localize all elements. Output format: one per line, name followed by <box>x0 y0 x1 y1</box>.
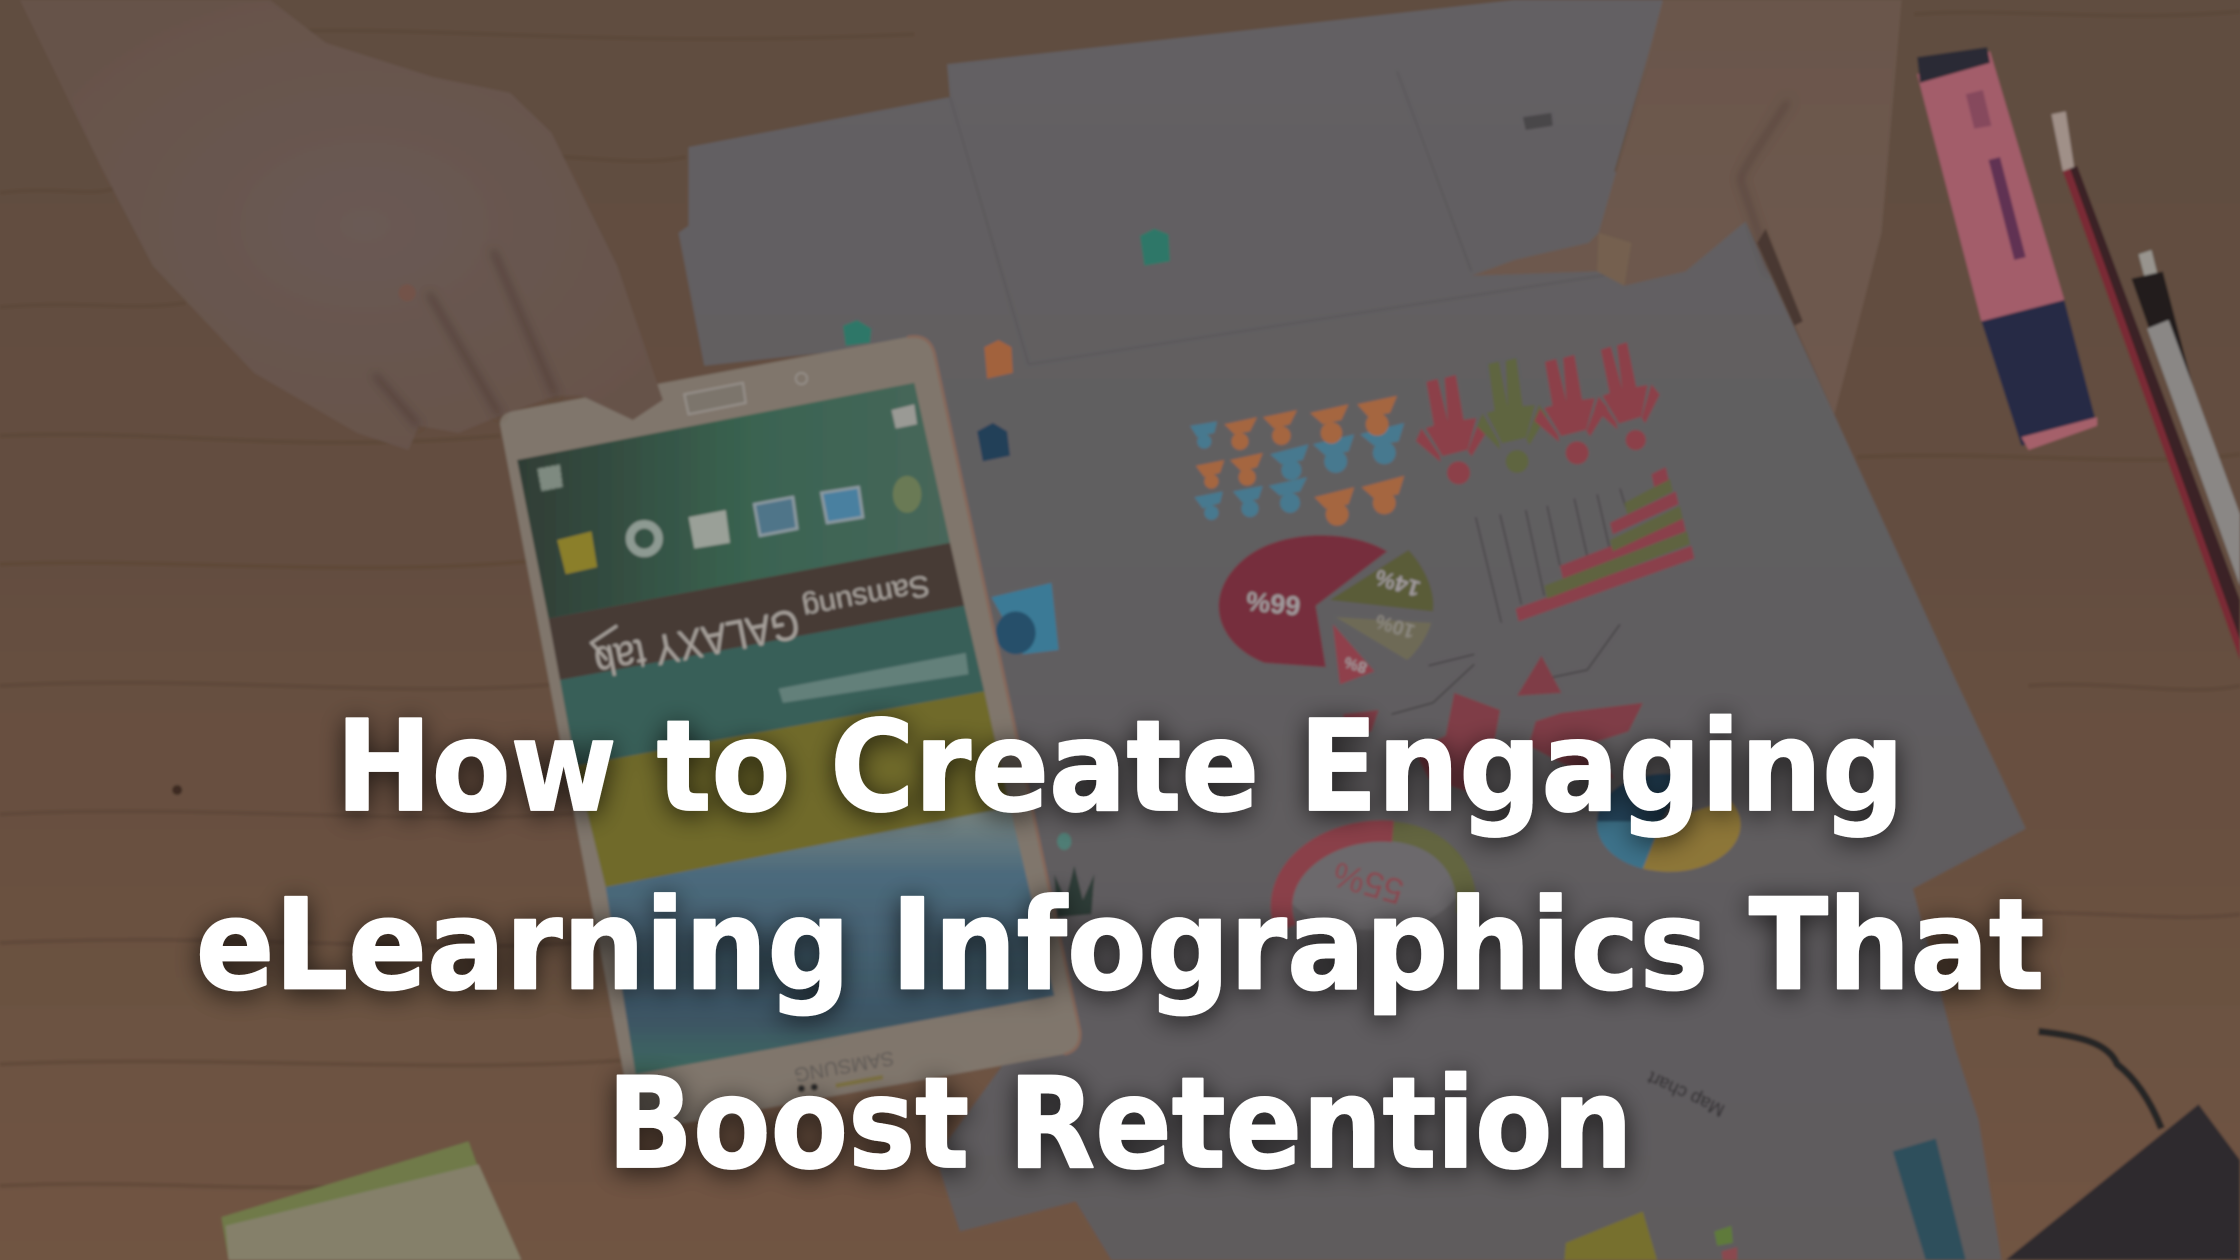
tablet <box>500 336 1080 1126</box>
upside-down device brand label <box>591 568 932 686</box>
pie chart with percentages: 10% <box>1373 609 1418 642</box>
tablet screen <box>517 383 1054 1074</box>
large inverted figures pictogram <box>1408 338 1664 484</box>
sticky notes <box>221 1141 521 1260</box>
black notebook with strap <box>2006 1031 2240 1260</box>
title line 2: eLearning Infographics That <box>196 872 2044 1019</box>
pie chart with percentages: 8% <box>1342 653 1369 676</box>
upside-down device brand label: Samsung <box>800 568 932 625</box>
title line 3: Boost Retention <box>607 1050 1633 1197</box>
title <box>196 693 2044 1197</box>
red pencil <box>2051 111 2240 660</box>
upside-down device brand label: GALAXY tab <box>591 599 803 686</box>
left hand <box>0 0 663 450</box>
pink highlighter <box>1917 47 2097 450</box>
title line 1: How to Create Engaging <box>336 693 1904 840</box>
pie chart with percentages: 66% <box>1245 585 1302 622</box>
crowd of small figures pictogram <box>1190 396 1404 526</box>
icon: small colored tabs on paper <box>843 229 1170 917</box>
printed paper stack <box>679 0 2026 1260</box>
color wheel chart <box>1597 774 1741 872</box>
donut chart with percentage: 55% <box>1328 854 1408 912</box>
horizontal bar chart <box>1476 467 1694 623</box>
map chart with callouts <box>1343 624 1643 793</box>
right hand <box>1471 0 1901 414</box>
map chart footer and document corner: Map chart <box>1643 1067 1728 1121</box>
map chart footer and document corner <box>1564 1067 1966 1260</box>
donut chart with percentage <box>1282 831 1466 930</box>
tablet: SAMSUNG <box>792 1046 896 1086</box>
pie chart with percentages: 14% <box>1372 564 1423 602</box>
pie chart with percentages <box>1219 535 1433 684</box>
white marker pen <box>2131 250 2240 586</box>
